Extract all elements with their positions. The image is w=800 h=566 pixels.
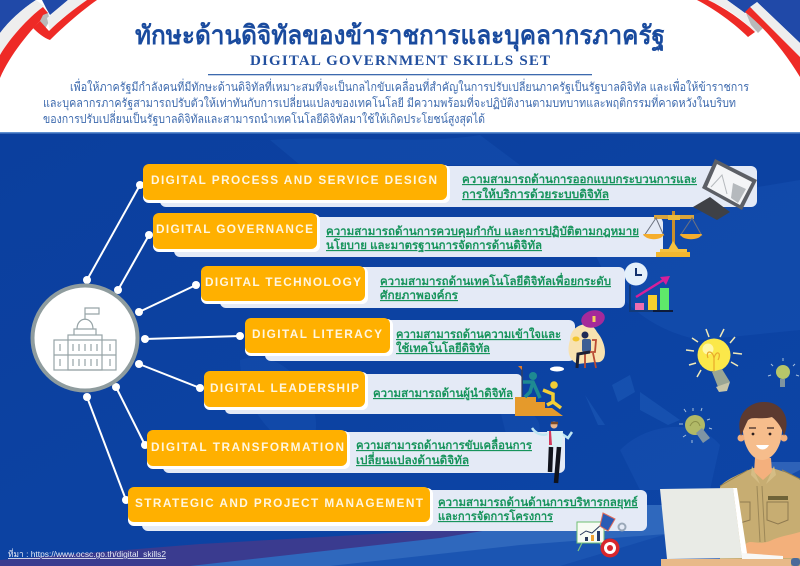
skill 6: digital transformation: ความสามารถด้านการขับเคลื่อนการ: [356, 436, 533, 452]
skill 4: digital literacy: ความสามารถด้านความเข้าใจและ: [396, 327, 561, 341]
icon: businessman presenting: [532, 422, 572, 483]
connector lines: [83, 181, 244, 504]
skill 3: digital technology: ศักยภาพองค์กร: [380, 288, 459, 302]
icon: leaders climbing stairs: [515, 366, 564, 416]
central circle with government building icon: [32, 286, 138, 390]
skill 7: strategic and project management: ความสามารถด้านด้านการบริหารกลยุทธ์: [438, 495, 638, 510]
skill 2: digital governance: นโยบาย และมาตรฐานการจัดการด้านดิจิทัล: [326, 237, 542, 253]
skill 7: strategic and project management: [128, 487, 647, 531]
subtitle: DIGITAL GOVERNMENT SKILLS SET: [250, 53, 550, 69]
skill 4: digital literacy: ใช้เทคโนโลยีดิจิทัล: [396, 340, 490, 355]
icon: scales of justice: [643, 211, 702, 257]
skill 7: strategic and project management: STRATEGIC AND PROJECT MANAGEMENT: [135, 496, 424, 510]
icon: presentation board and target: [577, 513, 626, 558]
skill 7: strategic and project management: และการจัดการโครงการ: [438, 508, 554, 523]
icon: person reading with idea bubble: [569, 308, 607, 368]
bottom bands: [0, 470, 800, 566]
ribbon: top right: [697, 0, 800, 77]
intro paragraph: และบุคลากรภาครัฐสามารถปรับตัวให้เท่าทันกับการเปลี่ยนแปลงของเทคโนโลยี มีความพร้อมที่จะปฏิบัติงานตามบทบาทและพฤติกรรมที่คาดหวังในบริบท: [43, 94, 736, 111]
icon: small light bulb: [768, 358, 799, 387]
intro paragraph: ของการปรับเปลี่ยนเป็นรัฐบาลดิจิทัลและสามารถนำเทคโนโลยีดิจิทัลมาใช้ให้เกิดประโยชน์สูงสุดได้: [43, 110, 485, 127]
skill 3: digital technology: DIGITAL TECHNOLOGY: [205, 275, 361, 289]
skill 2: digital governance: DIGITAL GOVERNANCE: [156, 222, 313, 236]
ribbon: top left: [0, 0, 97, 78]
skill 5: digital leadership: ความสามารถด้านผู้นำดิจิทัล: [373, 386, 513, 401]
skill 5: digital leadership: [204, 371, 522, 414]
icon: clock and growth chart: [624, 262, 673, 312]
intro paragraph: [43, 78, 749, 127]
skill 1: digital process and service design: [143, 164, 757, 207]
skill 2: digital governance: [153, 213, 663, 257]
skill 3: digital technology: [201, 266, 625, 308]
icon: large light bulb: [686, 329, 742, 392]
skill 5: digital leadership: DIGITAL LEADERSHIP: [210, 381, 359, 395]
skill 4: digital literacy: DIGITAL LITERACY: [252, 327, 382, 341]
illustration: officer with laptop: [660, 402, 800, 566]
icon: tablet and keyboard: [693, 159, 757, 220]
skill 1: digital process and service design: DIGITAL PROCESS AND SERVICE DESIGN: [151, 173, 437, 187]
skill 1: digital process and service design: การให้บริการด้วยระบบดิจิทัล: [462, 187, 609, 201]
skill 6: digital transformation: เปลี่ยนแปลงด้านดิจิทัล: [356, 451, 469, 467]
skill 3: digital technology: ความสามารถด้านเทคโนโลยีดิจิทัลเพื่อยกระดับ: [380, 272, 611, 288]
skill 6: digital transformation: DIGITAL TRANSFORMATION: [151, 440, 344, 454]
blue background panel: [0, 132, 800, 566]
skill 6: digital transformation: [147, 430, 565, 473]
skill 4: digital literacy: [245, 318, 575, 361]
header background: [0, 0, 800, 133]
source footer: ที่มา : https://www.ocsc.go.th/digital_skills2: [8, 548, 166, 559]
title: ทักษะด้านดิจิทัลของข้าราชการและบุคลากรภาครัฐ: [135, 20, 665, 53]
skill 1: digital process and service design: ความสามารถด้านการออกแบบกระบวนการและ: [462, 173, 697, 186]
icon: dim light bulb: [679, 408, 712, 443]
skill 2: digital governance: ความสามารถด้านการควบคุมกำกับ และการปฏิบัติตามกฎหมาย: [326, 224, 639, 239]
